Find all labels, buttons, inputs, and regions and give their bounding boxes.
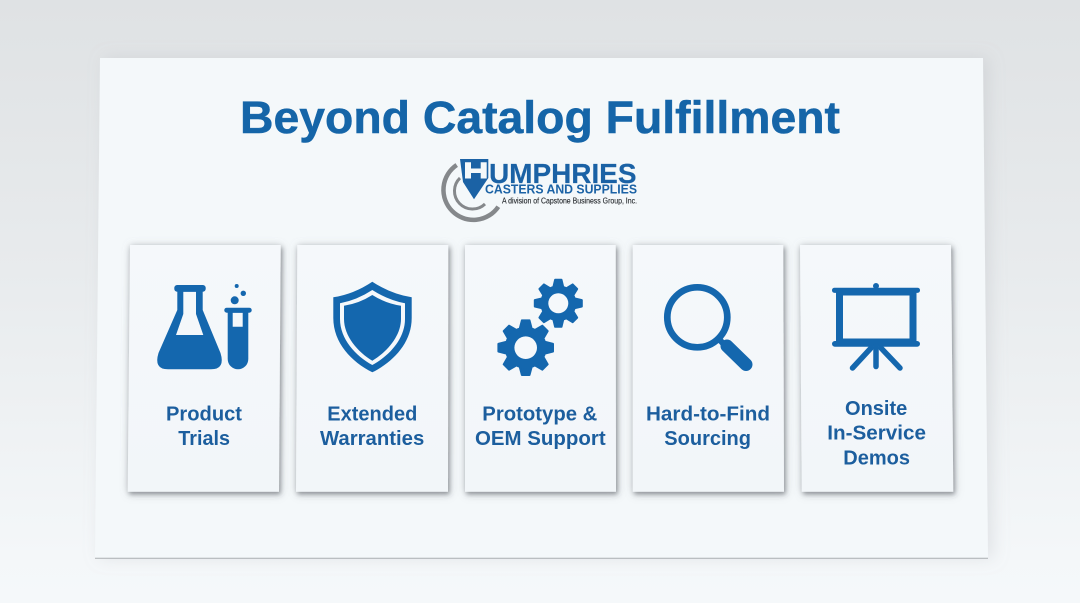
icon: magnifying glass xyxy=(667,287,746,364)
card xyxy=(296,245,448,492)
title: Beyond Catalog Fulfillment xyxy=(240,92,840,143)
logo tagline: A division of Capstone Business Group, Inc. xyxy=(502,196,637,206)
card xyxy=(128,245,281,492)
label: Warranties xyxy=(320,428,424,450)
panel: onsite in-service demos xyxy=(800,245,953,492)
label: Prototype & xyxy=(482,404,597,426)
icon: flask and test tube xyxy=(157,284,252,369)
icon: shield xyxy=(333,282,412,372)
logo: Humphries Casters and Supplies xyxy=(443,158,637,220)
icon: logo rings xyxy=(443,165,498,220)
upper gear xyxy=(535,280,582,327)
label xyxy=(475,404,606,450)
label: Extended xyxy=(327,404,417,426)
panel: extended warranties xyxy=(296,245,448,492)
card xyxy=(633,245,784,492)
panel: hard-to-find sourcing xyxy=(633,245,784,492)
label: Trials xyxy=(178,428,230,450)
label: In-Service xyxy=(827,422,926,444)
label: Demos xyxy=(843,447,910,469)
icon: presentation screen xyxy=(832,283,920,368)
label xyxy=(646,404,770,450)
card xyxy=(465,245,616,492)
label: Onsite xyxy=(845,398,907,420)
label: OEM Support xyxy=(475,428,606,450)
card xyxy=(800,245,953,492)
logo subtitle: CASTERS AND SUPPLIES xyxy=(485,182,637,196)
label xyxy=(166,404,242,450)
panel: board xyxy=(95,58,988,558)
label: Hard-to-Find xyxy=(646,404,770,426)
logo name: UMPHRIES xyxy=(489,158,636,189)
lower gear xyxy=(498,320,553,375)
panel: product trials xyxy=(128,245,281,492)
label: Sourcing xyxy=(664,428,751,450)
icon: logo shield xyxy=(460,159,488,199)
label xyxy=(827,398,926,469)
label xyxy=(320,404,424,450)
icon: gears xyxy=(498,280,582,375)
panel: prototype and OEM support xyxy=(465,245,616,492)
label: Product xyxy=(166,404,242,426)
